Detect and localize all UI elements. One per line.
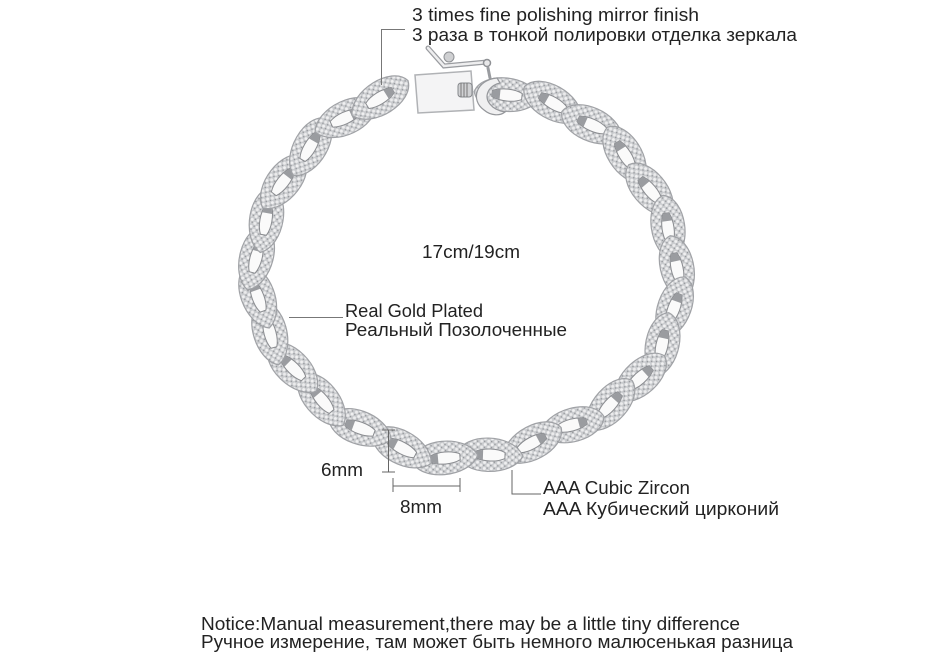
label: zircon: AAA Cubic Zircon — [543, 478, 690, 498]
label: zircon: AAA Кубический цирконий — [543, 499, 779, 519]
label: zircon — [543, 478, 779, 519]
label: polishing — [412, 5, 798, 45]
clasp ribbed connector — [458, 83, 472, 97]
notice: Notice:Manual measurement,there may be a little tiny difference — [201, 614, 740, 634]
label: plating: Real Gold Plated — [345, 301, 483, 321]
label: plating: Реальный Позолоченные — [345, 320, 567, 340]
zircon leader line — [512, 470, 541, 494]
clasp wire — [428, 48, 490, 78]
gold leader line — [289, 316, 343, 318]
label: polishing: 3 раза в тонкой полировки отделка зеркала — [412, 25, 798, 45]
height dimension — [382, 430, 395, 472]
label: 8mm: 8mm — [400, 497, 442, 517]
clasp box — [415, 71, 474, 113]
notice: Ручное измерение, там может быть немного малюсенькая разница — [201, 632, 794, 652]
width dimension — [393, 478, 460, 492]
label: 6mm: 6mm — [321, 460, 363, 480]
label: polishing: 3 times fine polishing mirror finish — [412, 5, 699, 25]
notice — [201, 614, 794, 652]
chain links — [231, 67, 701, 478]
clasp hook — [476, 78, 505, 115]
label: plating — [345, 301, 567, 340]
label: size: 17cm/19cm — [422, 242, 520, 262]
bracelet — [231, 48, 701, 478]
top leader line — [382, 30, 405, 85]
